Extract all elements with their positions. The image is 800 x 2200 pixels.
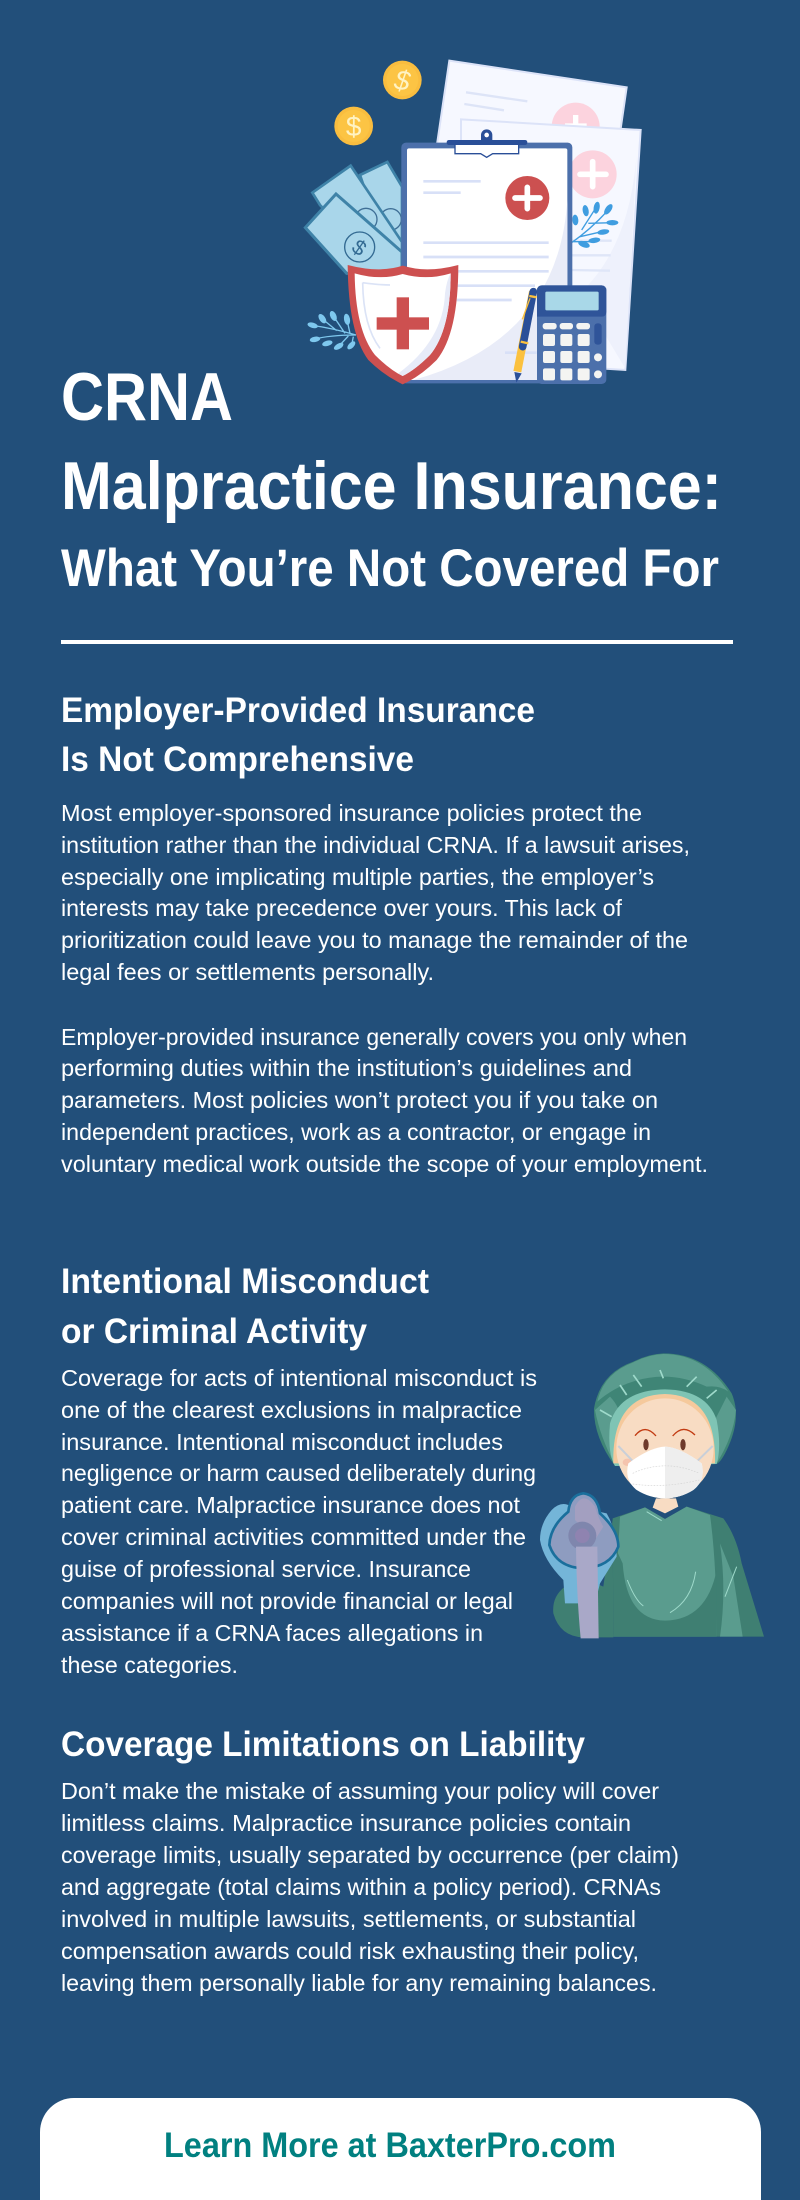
text block: coverage limitations paragraph: compensation awards could risk exhausting their policy, (61, 1938, 639, 1964)
text block: intentional misconduct paragraph: assistance if a CRNA faces allegations in (61, 1620, 483, 1646)
icon: gold coin lower: $ (346, 111, 362, 142)
text block: employer paragraph one: legal fees or settlements personally. (61, 959, 434, 985)
heading: coverage limitations: Coverage Limitations on Liability (61, 1725, 585, 1764)
text block: employer paragraph one: institution rather than the individual CRNA. If a lawsuit arises, (61, 832, 690, 858)
text block: coverage limitations paragraph: and aggregate (total claims within a policy period). CRNAs (61, 1874, 661, 1900)
neck (653, 1498, 678, 1513)
text block: coverage limitations paragraph: Don’t make the mistake of assuming your policy will cover (61, 1778, 659, 1804)
icon: calculator (537, 285, 606, 384)
text block: coverage limitations paragraph: limitless claims. Malpractice insurance policies contain (61, 1810, 631, 1836)
text block: intentional misconduct paragraph: companies will not provide financial or legal (61, 1588, 513, 1614)
heading: intentional misconduct: or Criminal Activity (61, 1312, 368, 1351)
heading: employer-provided insurance: Employer-Provided Insurance (61, 691, 535, 730)
heading: employer-provided insurance (61, 691, 535, 779)
text block: intentional misconduct paragraph: guise of professional service. Insurance (61, 1556, 471, 1582)
text block: intentional misconduct paragraph: cover criminal activities committed under the (61, 1524, 526, 1550)
icon: banknotes (305, 162, 402, 273)
text block: intentional misconduct paragraph: insurance. Intentional misconduct includes (61, 1429, 503, 1455)
title: CRNA (61, 359, 233, 435)
gloved hand (540, 1504, 617, 1603)
text block: employer paragraph two: Employer-provided insurance generally covers you only when (61, 1024, 687, 1050)
heading: intentional misconduct (61, 1262, 429, 1351)
clipboard (401, 129, 572, 383)
text block: intentional misconduct paragraph: one of the clearest exclusions in malpractice (61, 1397, 522, 1423)
call to action card (40, 2098, 761, 2200)
illustration: insurance documents, shield, money and calculator (305, 61, 641, 384)
text block: employer paragraph one: Most employer-sponsored insurance policies protect the (61, 800, 642, 826)
text block: intentional misconduct paragraph: patient care. Malpractice insurance does not (61, 1492, 520, 1518)
text block: coverage limitations paragraph: involved in multiple lawsuits, settlements, or substantial (61, 1906, 636, 1932)
text block: employer paragraph two (61, 1024, 708, 1177)
text block: employer paragraph two: independent practices, work as a contractor, or engage in (61, 1119, 651, 1145)
icon: pen (514, 292, 537, 383)
icon: gold coin lower (334, 107, 373, 145)
title: What You’re Not Covered For (61, 539, 719, 598)
text block: employer paragraph one: especially one implicating multiple parties, the employer’s (61, 864, 654, 890)
icon: gold coin top: $ (391, 64, 413, 97)
title: Malpractice Insurance: (61, 448, 722, 524)
icon: blue leaf sprig (571, 201, 618, 249)
text block: coverage limitations paragraph: leaving them personally liable for any remaining balances. (61, 1970, 657, 1996)
text block: intentional misconduct paragraph: these categories. (61, 1652, 238, 1678)
second paper sheet (461, 119, 641, 370)
text block: employer paragraph two: performing duties within the institution’s guidelines and (61, 1055, 632, 1081)
title (61, 359, 722, 598)
anesthesia mask and tube (549, 1493, 618, 1638)
icon: shield with cross (348, 265, 458, 384)
face mask (627, 1447, 703, 1498)
text block: intentional misconduct paragraph: Coverage for acts of intentional misconduct is (61, 1365, 537, 1391)
heading: intentional misconduct: Intentional Misconduct (61, 1262, 429, 1301)
text block: coverage limitations paragraph: coverage limits, usually separated by occurrence (per claim) (61, 1842, 679, 1868)
text block: employer paragraph two: parameters. Most policies won’t protect you if you take on (61, 1087, 658, 1113)
face (616, 1398, 714, 1498)
text block: employer paragraph one: prioritization could leave you to manage the remainder of the (61, 927, 688, 953)
text block: employer paragraph one (61, 800, 690, 985)
icon: banknotes: $ (347, 235, 371, 261)
text block: employer paragraph one: interests may take precedence over yours. This lack of (61, 895, 622, 921)
surgical cap (594, 1353, 736, 1466)
heading: employer-provided insurance: Is Not Comprehensive (61, 740, 414, 779)
back paper sheet (437, 61, 627, 151)
illustration: anesthetist in scrubs holding a mask (540, 1353, 764, 1638)
gown (553, 1507, 764, 1637)
call to action text: Learn More at BaxterPro.com (164, 2126, 616, 2165)
text block: employer paragraph two: voluntary medical work outside the scope of your employment. (61, 1151, 708, 1177)
text block: coverage limitations paragraph (61, 1778, 679, 1996)
icon: leaf sprig left (307, 310, 357, 351)
icon: gold coin top (383, 61, 422, 99)
text block: intentional misconduct paragraph: negligence or harm caused deliberately during (61, 1460, 536, 1486)
text block: intentional misconduct paragraph (61, 1365, 537, 1678)
